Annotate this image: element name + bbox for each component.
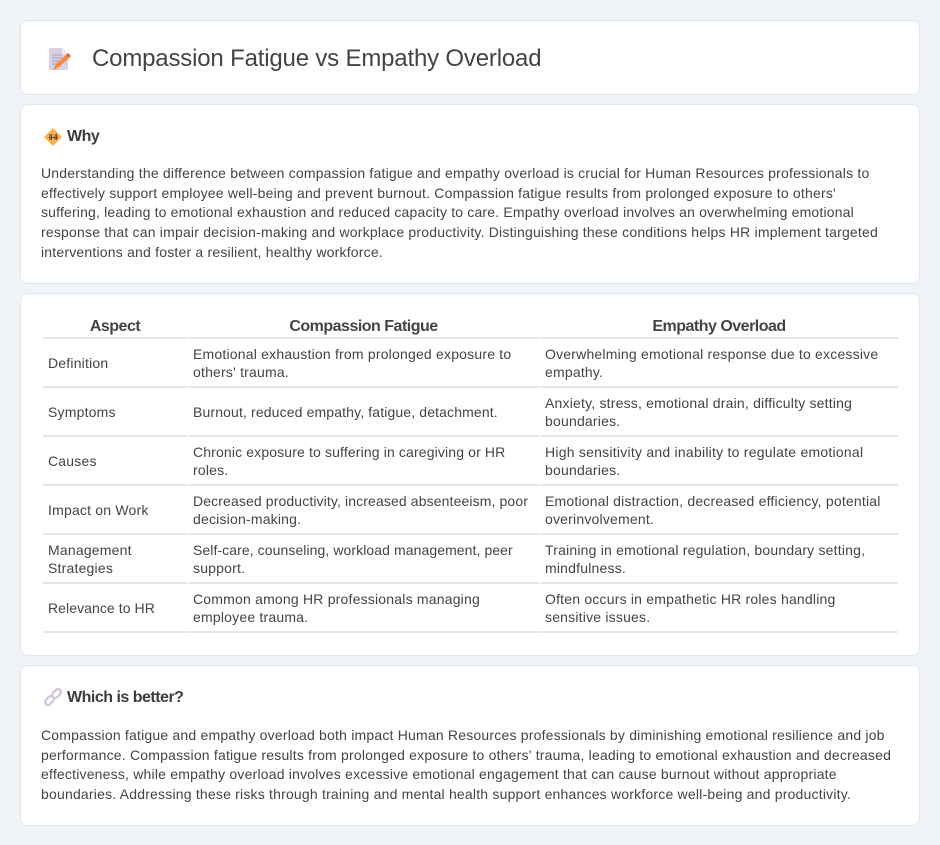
- row: management strategies: [48, 542, 865, 576]
- row: symptoms: Burnout, reduced empathy, fatigue, detachment.: [193, 404, 498, 420]
- title: Compassion Fatigue vs Empathy Overload: [92, 45, 541, 72]
- icon: chain link: [44, 688, 62, 706]
- row: causes: Causes: [48, 453, 97, 469]
- text block: why paragraph: Understanding the difference between compassion fatigue and empathy overload is crucial for Human Resources professionals to: [41, 165, 869, 181]
- row: relevance to HR: [48, 591, 836, 625]
- heading: which is better: Which is better?: [67, 689, 183, 706]
- text block: why paragraph: [41, 165, 878, 260]
- row: management strategies: Self-care, counseling, workload management, peer: [193, 542, 513, 558]
- row: definition: Overwhelming emotional response due to excessive: [545, 346, 878, 362]
- text block: which is better paragraph: performance. Compassion fatigue results from prolonged exposure to others' trauma, leading to emotional exhaustion and decreased: [41, 747, 891, 763]
- text block: why paragraph: response that can impair decision-making and workplace productivity. Distinguishing these conditions helps HR implement targeted: [41, 224, 878, 240]
- row: impact on work: [48, 493, 881, 527]
- panel: comparison table: [20, 293, 920, 656]
- row: definition: Emotional exhaustion from prolonged exposure to: [193, 346, 511, 362]
- row: impact on work: Impact on Work: [48, 502, 149, 518]
- panel: why: [20, 104, 920, 284]
- row: management strategies: Strategies: [48, 560, 113, 576]
- icon: diamond warning sign: [44, 128, 62, 146]
- table header row: Empathy Overload: [652, 318, 786, 335]
- heading: why: Why: [67, 128, 99, 145]
- row: relevance to HR: Often occurs in empathetic HR roles handling: [545, 591, 836, 607]
- text block: why paragraph: suffering, leading to emotional exhaustion and reduced capacity to care. Empathy overload involves an overwhelming emotional: [41, 204, 854, 220]
- row: definition: Definition: [48, 355, 108, 371]
- row: symptoms: Symptoms: [48, 404, 116, 420]
- row: management strategies: support.: [193, 560, 245, 576]
- table header row: [90, 318, 786, 335]
- text block: why paragraph: effectively support employee well-being and prevent burnout. Compassion fatigue results from prolonged exposure to others': [41, 185, 836, 201]
- row: definition: others' trauma.: [193, 364, 289, 380]
- row: relevance to HR: employee trauma.: [193, 609, 308, 625]
- row: impact on work: Emotional distraction, decreased efficiency, potential: [545, 493, 881, 509]
- row: symptoms: boundaries.: [545, 413, 620, 429]
- row: definition: [48, 346, 878, 380]
- text block: which is better paragraph: effectiveness, while empathy overload involves excessive emotional engagement that can cause burnout without appropriate: [41, 766, 837, 782]
- text block: which is better paragraph: boundaries. Addressing these risks through training and mental health support enhances workforce well-being and productivity.: [41, 786, 851, 802]
- text block: which is better paragraph: Compassion fatigue and empathy overload both impact Human Resources professionals by diminishing emotional resilience and job: [41, 727, 885, 743]
- row: causes: boundaries.: [545, 462, 620, 478]
- icon: document with pencil: [49, 48, 71, 70]
- row: management strategies: mindfulness.: [545, 560, 626, 576]
- text block: why paragraph: interventions and foster a resilient, healthy workforce.: [41, 244, 383, 260]
- row: symptoms: [48, 395, 852, 429]
- row: relevance to HR: Common among HR professionals managing: [193, 591, 480, 607]
- row: impact on work: decision-making.: [193, 511, 301, 527]
- panel: which is better: [20, 665, 920, 826]
- row: impact on work: overinvolvement.: [545, 511, 654, 527]
- row: management strategies: Management: [48, 542, 132, 558]
- row: impact on work: Decreased productivity, increased absenteeism, poor: [193, 493, 528, 509]
- row: causes: Chronic exposure to suffering in caregiving or HR: [193, 444, 505, 460]
- panel: title header: [20, 20, 920, 95]
- table header row: Aspect: [90, 318, 140, 335]
- row: causes: [48, 444, 863, 478]
- table header row: Compassion Fatigue: [289, 318, 438, 335]
- row: relevance to HR: sensitive issues.: [545, 609, 650, 625]
- row: causes: High sensitivity and inability to regulate emotional: [545, 444, 863, 460]
- text block: which is better paragraph: [41, 727, 891, 802]
- row: definition: empathy.: [545, 364, 603, 380]
- row: relevance to HR: Relevance to HR: [48, 600, 155, 616]
- row: management strategies: Training in emotional regulation, boundary setting,: [545, 542, 865, 558]
- row: causes: roles.: [193, 462, 228, 478]
- row: symptoms: Anxiety, stress, emotional drain, difficulty setting: [545, 395, 852, 411]
